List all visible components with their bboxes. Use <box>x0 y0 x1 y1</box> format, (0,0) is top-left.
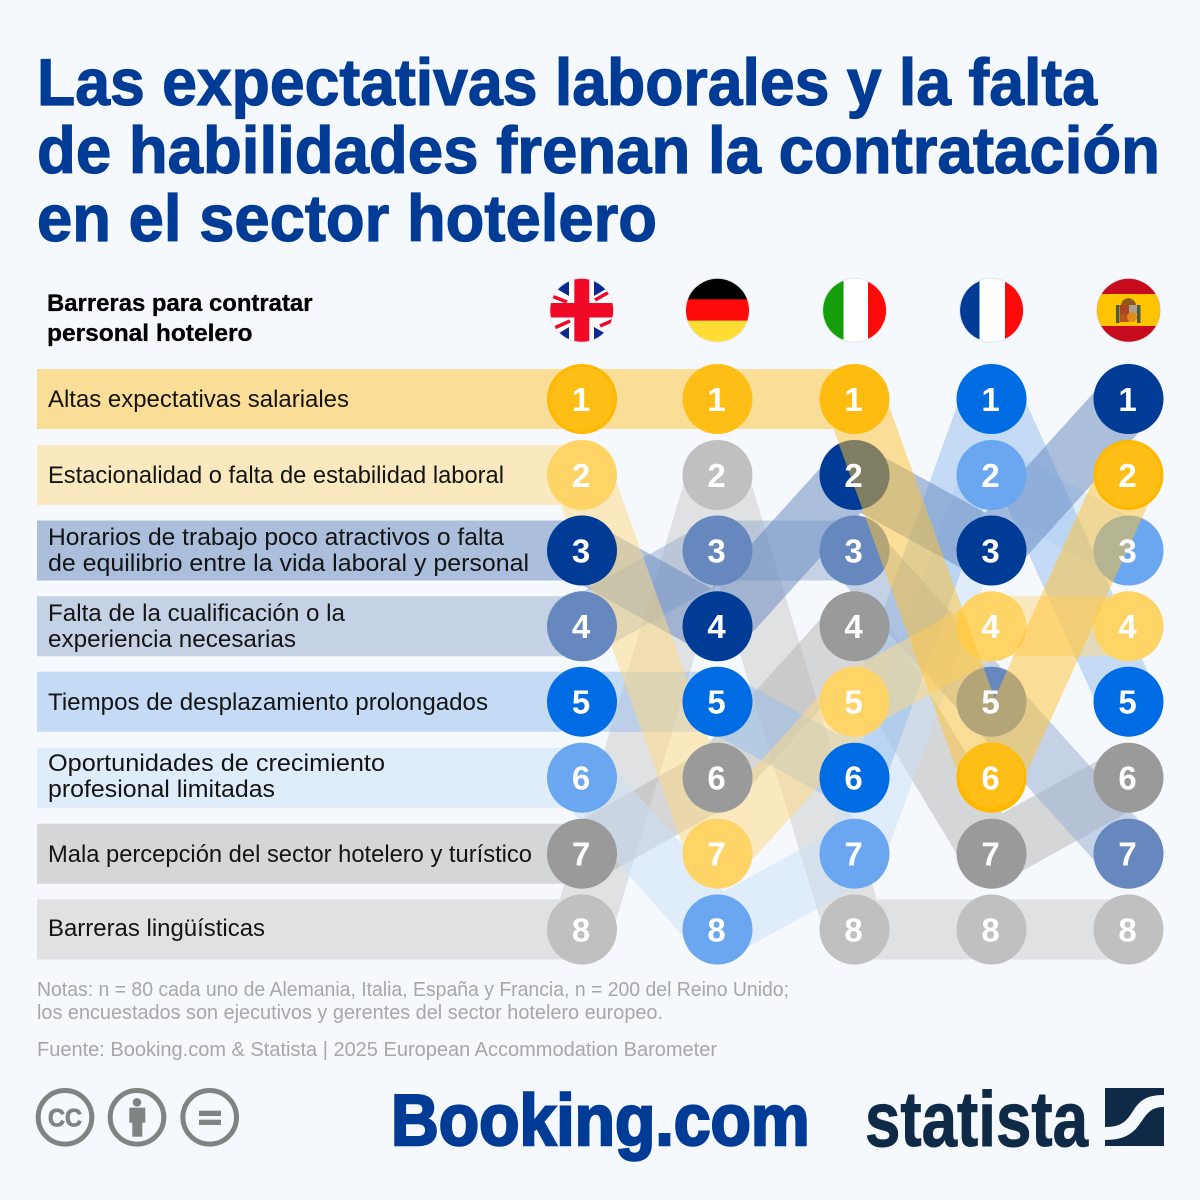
row labels: Estacionalidad o falta de estabilidad laboral <box>48 462 504 489</box>
source: Fuente: Booking.com & Statista | 2025 European Accommodation Barometer <box>37 1039 717 1061</box>
rank numbers: 3 <box>572 532 590 570</box>
icon: Italy flag <box>822 278 889 343</box>
rank numbers: 8 <box>844 912 863 948</box>
band: Barreras lingüísticas <box>37 475 1128 930</box>
rank numbers: 6 <box>1118 760 1137 796</box>
row labels: experiencia necesarias <box>48 626 296 653</box>
icon: France flag <box>959 278 1025 343</box>
row labels: Altas expectativas salariales <box>48 386 349 413</box>
title: de habilidades frenan la contratación <box>37 113 1160 187</box>
rank numbers: 2 <box>1118 457 1137 494</box>
rank numbers: 7 <box>572 836 590 872</box>
table heading: Barreras para contratar <box>47 290 312 317</box>
rank numbers: 1 <box>981 381 1000 418</box>
rank numbers <box>572 381 1137 948</box>
rank numbers: 1 <box>844 381 863 418</box>
icon: no derivatives <box>183 1090 236 1144</box>
rank numbers: 3 <box>707 532 726 570</box>
rank numbers: 1 <box>1118 381 1137 418</box>
rank numbers: 2 <box>844 457 863 494</box>
rank numbers: 4 <box>844 608 863 645</box>
icon: Germany flag <box>685 278 750 343</box>
logo: Statista: statista <box>865 1075 1088 1163</box>
row labels <box>48 386 532 942</box>
row labels: Horarios de trabajo poco atractivos o falta <box>48 524 505 551</box>
rank numbers: 3 <box>1118 532 1137 570</box>
title: en el sector hotelero <box>37 181 657 255</box>
rank numbers: 8 <box>981 912 1000 948</box>
band: Falta de cualificación <box>37 550 1128 854</box>
rank numbers: 2 <box>707 457 726 494</box>
top-ranked salary circles <box>547 364 1164 813</box>
rank numbers: 6 <box>981 760 1000 796</box>
band: Mala percepción <box>37 626 1128 854</box>
icon: Spain flag <box>1096 278 1161 343</box>
rank numbers: 7 <box>707 836 726 872</box>
band: Estacionalidad <box>37 475 1128 854</box>
rank numbers: 5 <box>981 684 1000 720</box>
rank circles <box>547 364 1164 964</box>
row labels: Falta de la cualificación o la <box>48 600 346 627</box>
band: Oportunidades de crecimiento <box>37 475 1128 930</box>
rank numbers: 1 <box>707 381 726 418</box>
rank numbers: 5 <box>844 684 863 720</box>
row labels: Oportunidades de crecimiento <box>48 750 385 777</box>
row labels: profesional limitadas <box>48 776 275 803</box>
band: Horarios de trabajo <box>37 399 1128 626</box>
table heading <box>47 290 312 347</box>
row labels: Tiempos de desplazamiento prolongados <box>48 689 488 716</box>
notes <box>37 979 789 1024</box>
rank numbers: 8 <box>572 912 590 948</box>
icon: creative commons <box>38 1090 92 1144</box>
rank numbers: 8 <box>707 912 726 948</box>
icon: United Kingdom flag <box>549 278 614 343</box>
rank numbers: 2 <box>981 457 1000 494</box>
rank numbers: 3 <box>981 532 1000 570</box>
row labels: de equilibrio entre la vida laboral y personal <box>48 550 529 577</box>
rank numbers: 2 <box>572 457 590 494</box>
rank numbers: 4 <box>707 608 726 645</box>
rank numbers: 7 <box>981 836 1000 872</box>
chart: rank bands <box>37 399 1128 930</box>
rank numbers: 6 <box>572 760 590 796</box>
notes: los encuestados son ejecutivos y gerentes del sector hotelero europeo. <box>37 1002 663 1024</box>
rank numbers: 8 <box>1118 912 1137 948</box>
title: Las expectativas laborales y la falta <box>37 45 1098 119</box>
rank numbers: 4 <box>572 608 591 645</box>
table heading: personal hotelero <box>47 320 252 347</box>
band: Tiempos de desplazamiento <box>37 399 1128 778</box>
flags row <box>545 275 1161 345</box>
rank numbers: 4 <box>1118 608 1137 645</box>
icon: attribution <box>110 1090 164 1144</box>
rank numbers: 3 <box>844 532 863 570</box>
rank numbers: 5 <box>707 684 726 720</box>
rank numbers: 6 <box>844 760 863 796</box>
rank numbers: 4 <box>981 608 1000 645</box>
logo: Booking.com: Booking.com <box>391 1081 810 1161</box>
band: Altas expectativas salariales <box>37 399 1128 778</box>
rank numbers: 5 <box>572 684 590 720</box>
row labels: Mala percepción del sector hotelero y turístico <box>48 841 532 868</box>
row labels: Barreras lingüísticas <box>48 915 265 942</box>
rank numbers: 6 <box>707 760 726 796</box>
rank numbers: 5 <box>1118 684 1137 720</box>
icon: creative commons: CC <box>48 1104 82 1132</box>
rank numbers: 7 <box>844 836 863 872</box>
notes: Notas: n = 80 cada uno de Alemania, Italia, España y Francia, n = 200 del Reino Unido; <box>37 979 789 1001</box>
rank numbers: 7 <box>1118 836 1137 872</box>
title <box>37 45 1160 255</box>
rank numbers: 1 <box>572 381 590 418</box>
